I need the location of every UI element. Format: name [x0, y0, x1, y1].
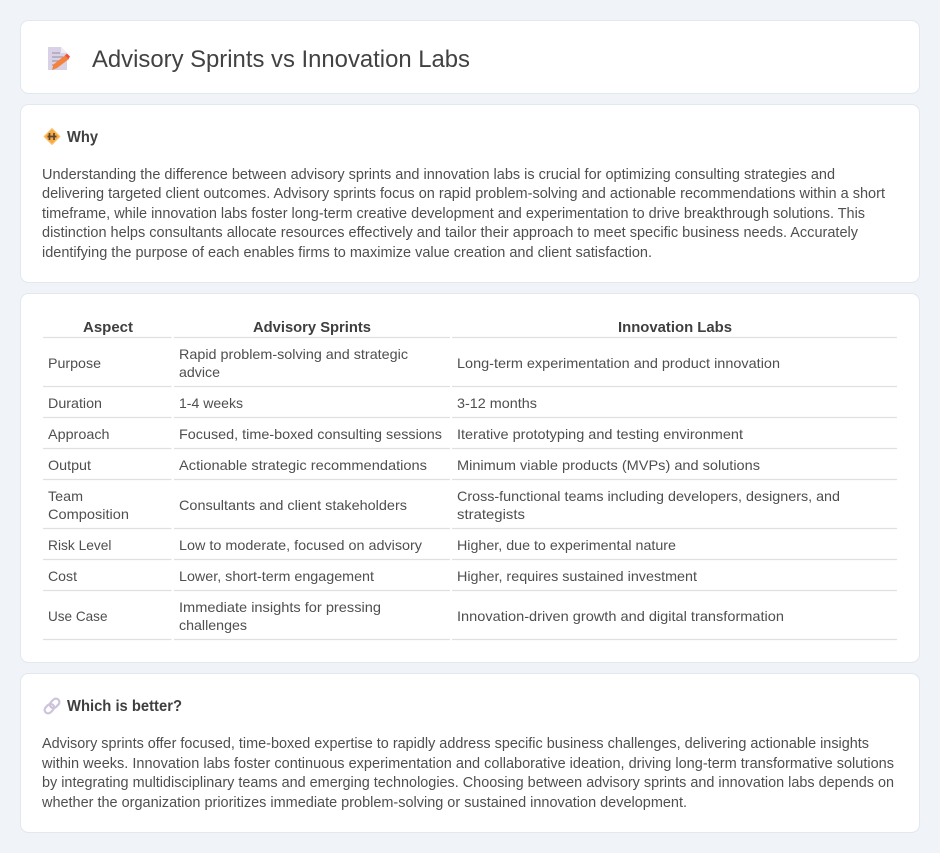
row: duration	[48, 395, 537, 411]
text block: why paragraph: Understanding the difference between advisory sprints and innovation labs is crucial for optimizing consulting strategies and	[42, 167, 835, 183]
text block: why paragraph: timeframe, while innovation labs foster long-term creative development and experimentation to drive breakthrough solutions. This	[42, 206, 865, 222]
icon: link	[43, 697, 61, 715]
row: duration: 1-4 weeks	[179, 395, 243, 411]
row: output: Output	[48, 457, 91, 473]
row: purpose: Long-term experimentation and product innovation	[457, 355, 780, 371]
row: cost: Cost	[48, 568, 77, 584]
row: use case: Innovation-driven growth and digital transformation	[457, 608, 784, 624]
row: risk level: Higher, due to experimental nature	[457, 537, 676, 553]
row: team composition: Cross-functional teams including developers, designers, and	[457, 488, 840, 504]
text block: why paragraph	[42, 167, 885, 261]
table header row	[83, 320, 732, 336]
text block: which is better paragraph: whether the organization prioritizes immediate problem-solving or sustained innovation development.	[41, 795, 687, 811]
row: purpose: Purpose	[48, 355, 101, 371]
heading: why: Why	[67, 129, 98, 146]
text block: which is better paragraph: within weeks. Innovation labs foster continuous experimentation and collaborative ideation, driving long-term transformative solutions	[41, 756, 894, 772]
row: cost: Higher, requires sustained investment	[457, 568, 697, 584]
row: approach: Iterative prototyping and testing environment	[457, 426, 743, 442]
text block: which is better paragraph: Advisory sprints offer focused, time-boxed expertise to rapidly address specific business challenges, delivering actionable insights	[42, 736, 869, 752]
row: risk level	[48, 537, 676, 553]
row: risk level: Risk Level	[48, 537, 112, 553]
panel: why	[20, 104, 920, 282]
icon: children crossing sign	[44, 128, 60, 144]
text block: why paragraph: delivering targeted client outcomes. Advisory sprints focus on rapid problem-solving and actionable recommendations within a short	[42, 186, 885, 202]
row: risk level: Low to moderate, focused on advisory	[179, 537, 422, 553]
table header row: Innovation Labs	[618, 320, 732, 336]
row: duration: Duration	[48, 395, 102, 411]
row: team composition: Consultants and client stakeholders	[179, 497, 407, 513]
row: output: Minimum viable products (MVPs) and solutions	[457, 457, 760, 473]
panel: which is better	[20, 674, 920, 832]
row: team composition	[48, 488, 840, 522]
text block: why paragraph: identifying the purpose of each enables firms to maximize value creation and client satisfaction.	[42, 245, 652, 261]
row: team composition: strategists	[457, 506, 525, 522]
title: Advisory Sprints vs Innovation Labs	[92, 46, 470, 73]
row: cost: Lower, short-term engagement	[179, 568, 374, 584]
row: duration: 3-12 months	[457, 395, 537, 411]
row: purpose: advice	[179, 364, 220, 380]
table header row: Advisory Sprints	[253, 320, 371, 336]
heading: which is better: Which is better?	[67, 698, 182, 715]
row: team composition: Composition	[48, 506, 129, 522]
row: output	[48, 457, 760, 473]
row: approach: Approach	[48, 426, 110, 442]
text block: why paragraph: distinction helps consultants allocate resources effectively and tailor their approach to meet specific business needs. Accurately	[42, 225, 859, 241]
panel: title header	[20, 20, 920, 94]
row: approach: Focused, time-boxed consulting sessions	[179, 426, 442, 442]
row: purpose	[48, 346, 780, 380]
row: use case: challenges	[179, 617, 247, 633]
row: cost	[48, 568, 697, 584]
row: use case: Immediate insights for pressing	[179, 599, 381, 615]
text block: which is better paragraph	[41, 736, 894, 811]
panel: comparison table	[20, 294, 920, 662]
table header row: Aspect	[83, 320, 133, 336]
row: approach	[48, 426, 743, 442]
text block: which is better paragraph: by integrating multidisciplinary teams and emerging technologies. Choosing between advisory sprints and innovation labs depends on	[42, 775, 894, 791]
row: use case	[48, 599, 784, 633]
row: use case: Use Case	[48, 608, 108, 624]
row: output: Actionable strategic recommendations	[179, 457, 427, 473]
icon: document with pencil	[48, 47, 70, 70]
row: team composition: Team	[48, 488, 83, 504]
row: purpose: Rapid problem-solving and strategic	[179, 346, 408, 362]
